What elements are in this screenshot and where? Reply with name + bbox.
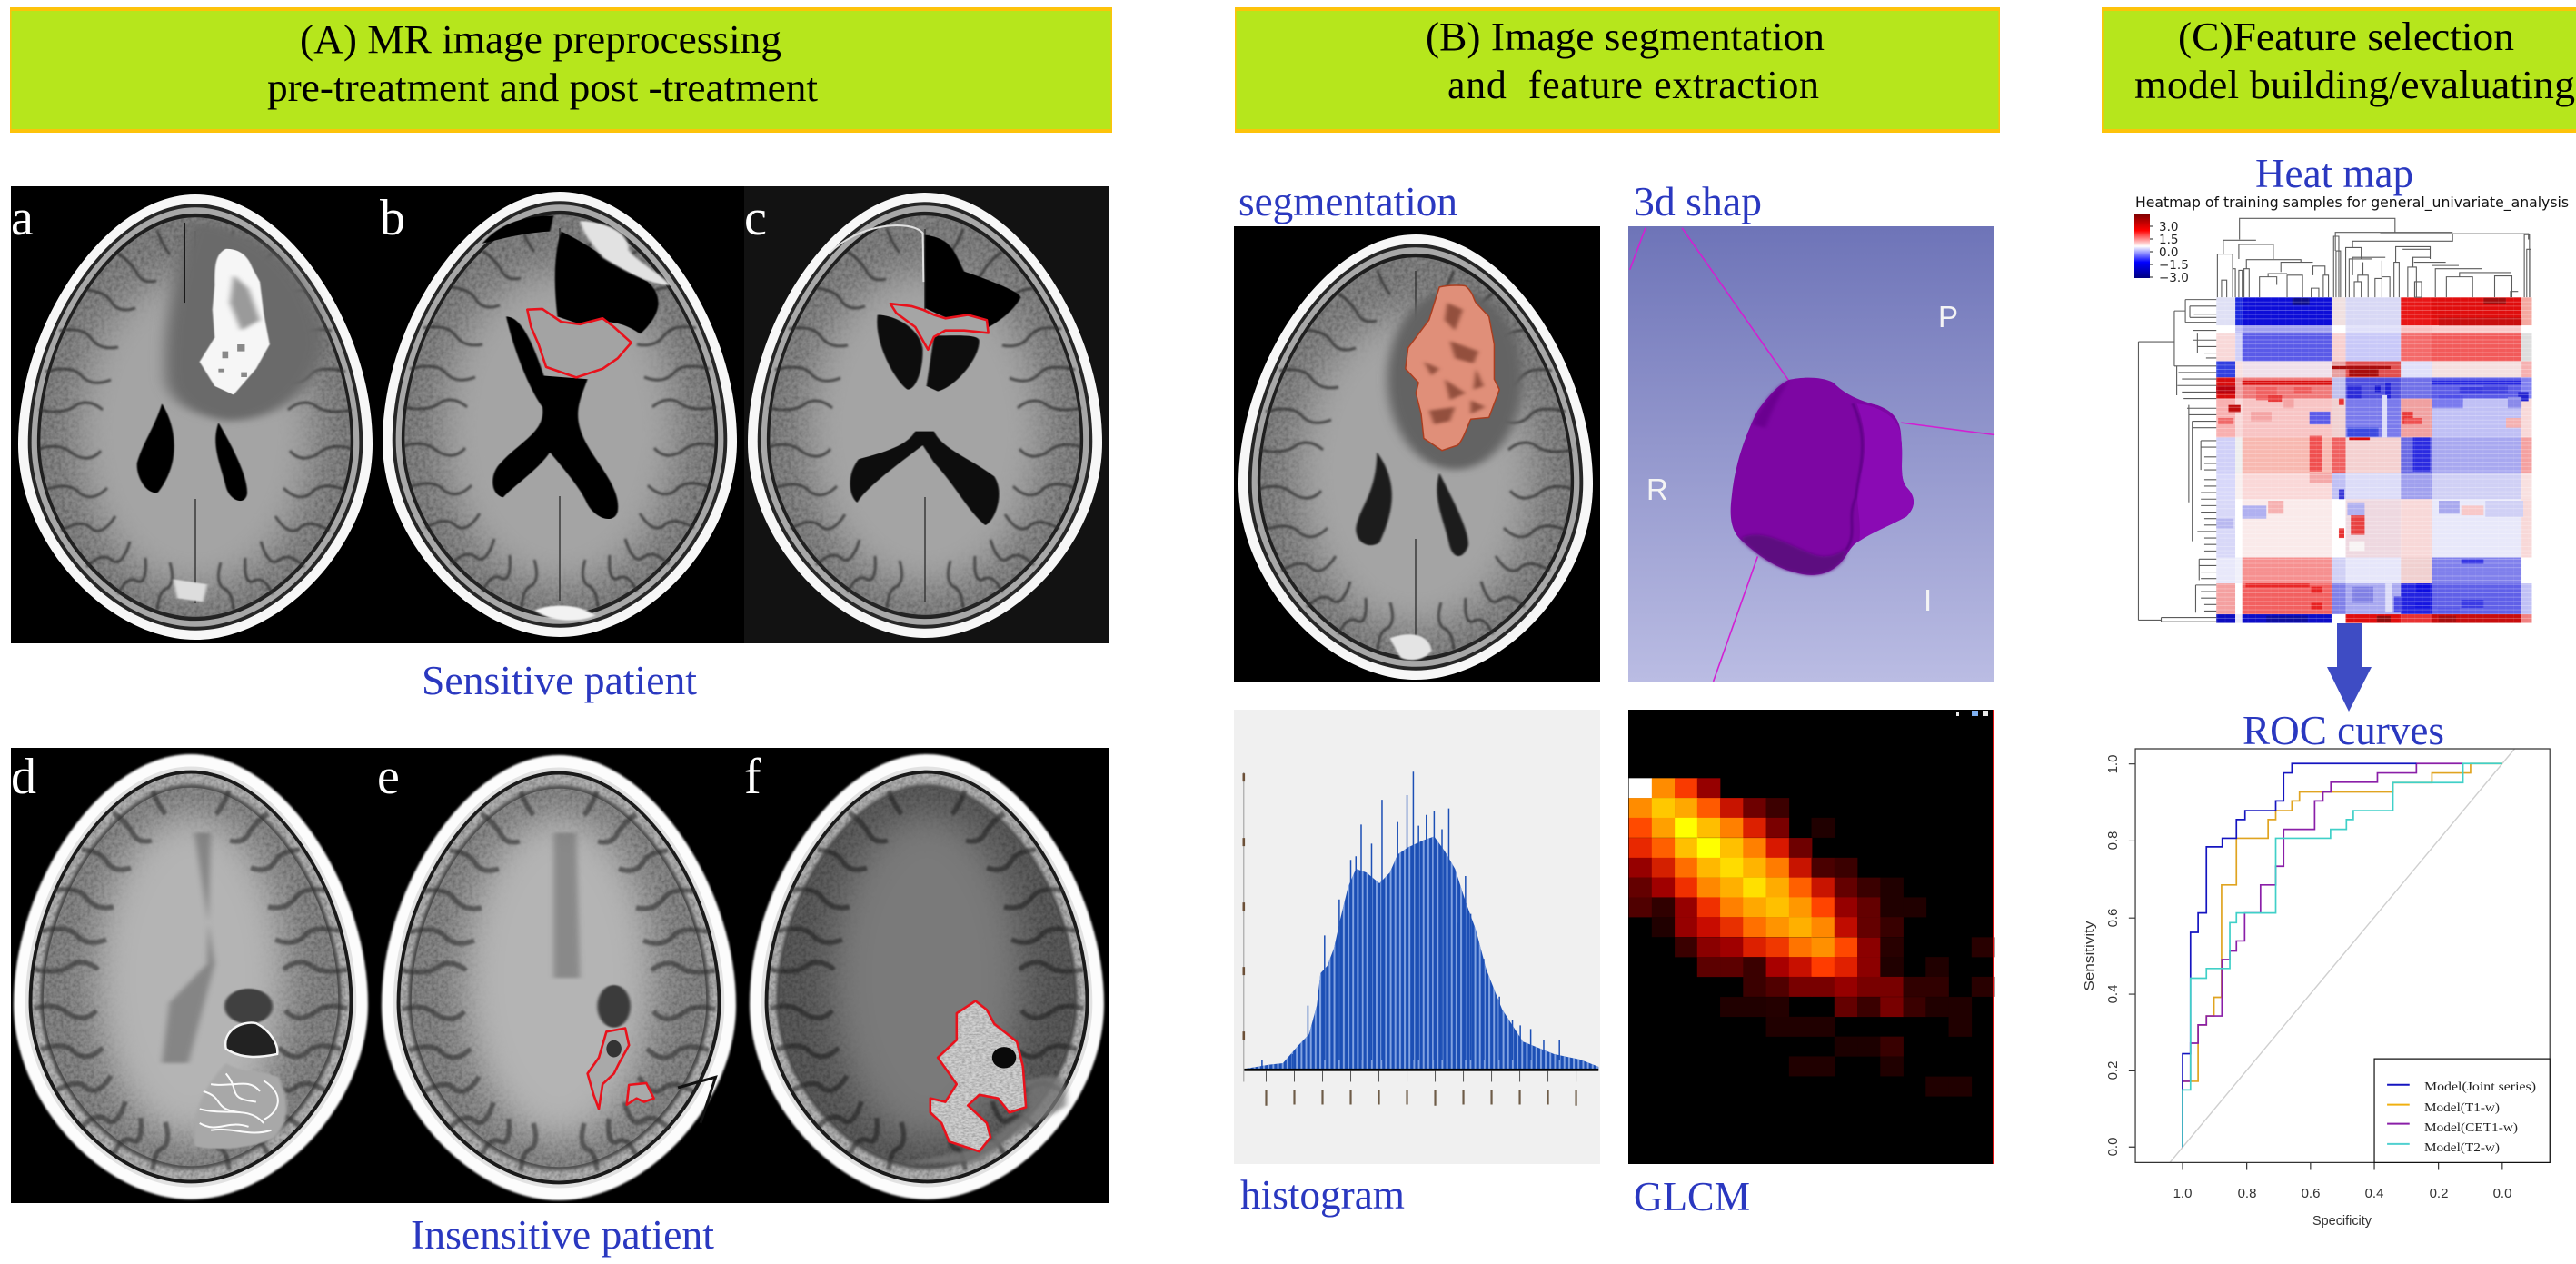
- caption: sensitive patient: Sensitive patient: [422, 658, 697, 703]
- orientation letters: I: [1924, 583, 1932, 617]
- x axis tick labels: 0.4: [2365, 1186, 2383, 1201]
- orientation letters: R: [1646, 473, 1668, 506]
- legend labels: Model(Joint series): [2424, 1080, 2536, 1094]
- colour scale legend: 3.0: [2159, 220, 2178, 234]
- colour scale legend: −1.5: [2159, 258, 2189, 273]
- y axis tick labels: 0.0: [2105, 1138, 2121, 1156]
- legend labels: Model(CET1-w): [2424, 1121, 2518, 1135]
- label: histogram: histogram: [1240, 1172, 1405, 1218]
- label: ROC curves: ROC curves: [2243, 708, 2444, 753]
- top dendrogram: [2217, 218, 2531, 297]
- orientation letters: P: [1938, 300, 1958, 333]
- panel letter b: b: [380, 190, 405, 246]
- panel: insensitive patient MR scans: [11, 748, 1109, 1203]
- panel: GLCM matrix: [1628, 710, 1994, 1164]
- y axis tick labels: 0.4: [2105, 985, 2121, 1003]
- heading banner B: and feature extraction: [1447, 63, 1819, 107]
- heading banner A: (A) MR image preprocessing: [300, 17, 781, 62]
- heading banner C: model building/evaluating: [2134, 63, 2575, 107]
- curve: CET1-w: [2183, 763, 2463, 1147]
- label: segmentation: segmentation: [1238, 179, 1457, 224]
- heading banner C: (C)Feature selection: [2178, 15, 2514, 59]
- heading banner A: pre-treatment and post -treatment: [267, 65, 818, 110]
- x axis tick labels: 0.8: [2238, 1186, 2256, 1201]
- curve: T1-w: [2183, 763, 2502, 1147]
- left dendrogram: [2138, 300, 2216, 622]
- heading banner A: [10, 7, 1112, 133]
- colour scale legend: [2134, 214, 2189, 285]
- y axis title: Sensitivity: [2082, 921, 2097, 990]
- label: Heat map: Heat map: [2255, 151, 2413, 196]
- 3D tumor mesh: [1731, 378, 1914, 575]
- y axis tick labels: [2105, 755, 2121, 1156]
- plot frame and ticks: [2129, 749, 2550, 1170]
- y axis tick labels: 0.8: [2105, 831, 2121, 850]
- y axis tick labels: 0.6: [2105, 909, 2121, 927]
- legend labels: [2424, 1080, 2536, 1155]
- MR scan f: follow-up tumor: [744, 749, 1104, 1199]
- tumor outline e: [588, 1029, 654, 1109]
- heatmap cells: [2216, 297, 2531, 623]
- panel letter e: e: [377, 749, 400, 805]
- panel letter f: f: [744, 749, 761, 805]
- tumor mask overlay: [1406, 285, 1499, 451]
- label: GLCM: GLCM: [1634, 1174, 1750, 1219]
- heading banner B: [1235, 7, 2000, 133]
- colour scale legend: −3.0: [2159, 271, 2189, 285]
- curve: Joint series: [2183, 763, 2416, 1147]
- y axis tick labels: 1.0: [2105, 755, 2121, 773]
- legend labels: Model(T2-w): [2424, 1141, 2500, 1155]
- colour scale legend: 0.0: [2159, 245, 2178, 260]
- legend box: [2374, 1059, 2550, 1162]
- panel letter c: c: [744, 190, 767, 246]
- tumor outline f: [930, 1001, 1026, 1151]
- chart: clustered heatmap: [2134, 194, 2569, 623]
- panel letter a: a: [11, 190, 34, 246]
- panel: segmentation scan with tumor mask: [1234, 226, 1600, 682]
- heading banner B: (B) Image segmentation: [1426, 15, 1825, 59]
- colour scale legend: 1.5: [2159, 233, 2178, 247]
- x axis tick labels: 0.6: [2302, 1186, 2320, 1201]
- MR scan a: pre-treatment with bright tumor: [11, 190, 373, 640]
- x axis tick labels: [2173, 1186, 2511, 1201]
- y axis tick labels: 0.2: [2105, 1061, 2121, 1080]
- panel: histogram: [1234, 710, 1600, 1164]
- orientation letters: [1646, 300, 1958, 617]
- curve: T2-w: [2183, 763, 2502, 1147]
- heading banner C: [2102, 7, 2576, 133]
- x axis tick labels: 0.0: [2493, 1186, 2511, 1201]
- x axis tick labels: 1.0: [2173, 1186, 2192, 1201]
- x axis tick labels: 0.2: [2430, 1186, 2448, 1201]
- panel: 3D tumor shape: [1628, 226, 1994, 682]
- legend labels: Model(T1-w): [2424, 1101, 2500, 1115]
- x axis title: Specificity: [2312, 1213, 2372, 1229]
- panel letter d: d: [11, 749, 36, 805]
- tumor outline b: [527, 309, 632, 377]
- chart: ROC curves: [2082, 749, 2550, 1229]
- caption: insensitive patient: Insensitive patient: [411, 1212, 715, 1258]
- MR scan b: post-treatment with cavity: [380, 190, 737, 637]
- arrow: heatmap to ROC: [2327, 623, 2372, 712]
- label: 3d shap: 3d shap: [1634, 179, 1762, 224]
- panel: sensitive patient MR scans: [11, 186, 1109, 643]
- MR scan c: follow-up with residual tumor: [744, 190, 1102, 638]
- tumor outline c: [890, 304, 989, 350]
- MR scan e: post-treatment tumor: [377, 749, 736, 1200]
- heatmap title: Heatmap of training samples for general_univariate_analysis: [2135, 194, 2569, 212]
- MR scan d: pre-treatment tumor: [11, 749, 368, 1199]
